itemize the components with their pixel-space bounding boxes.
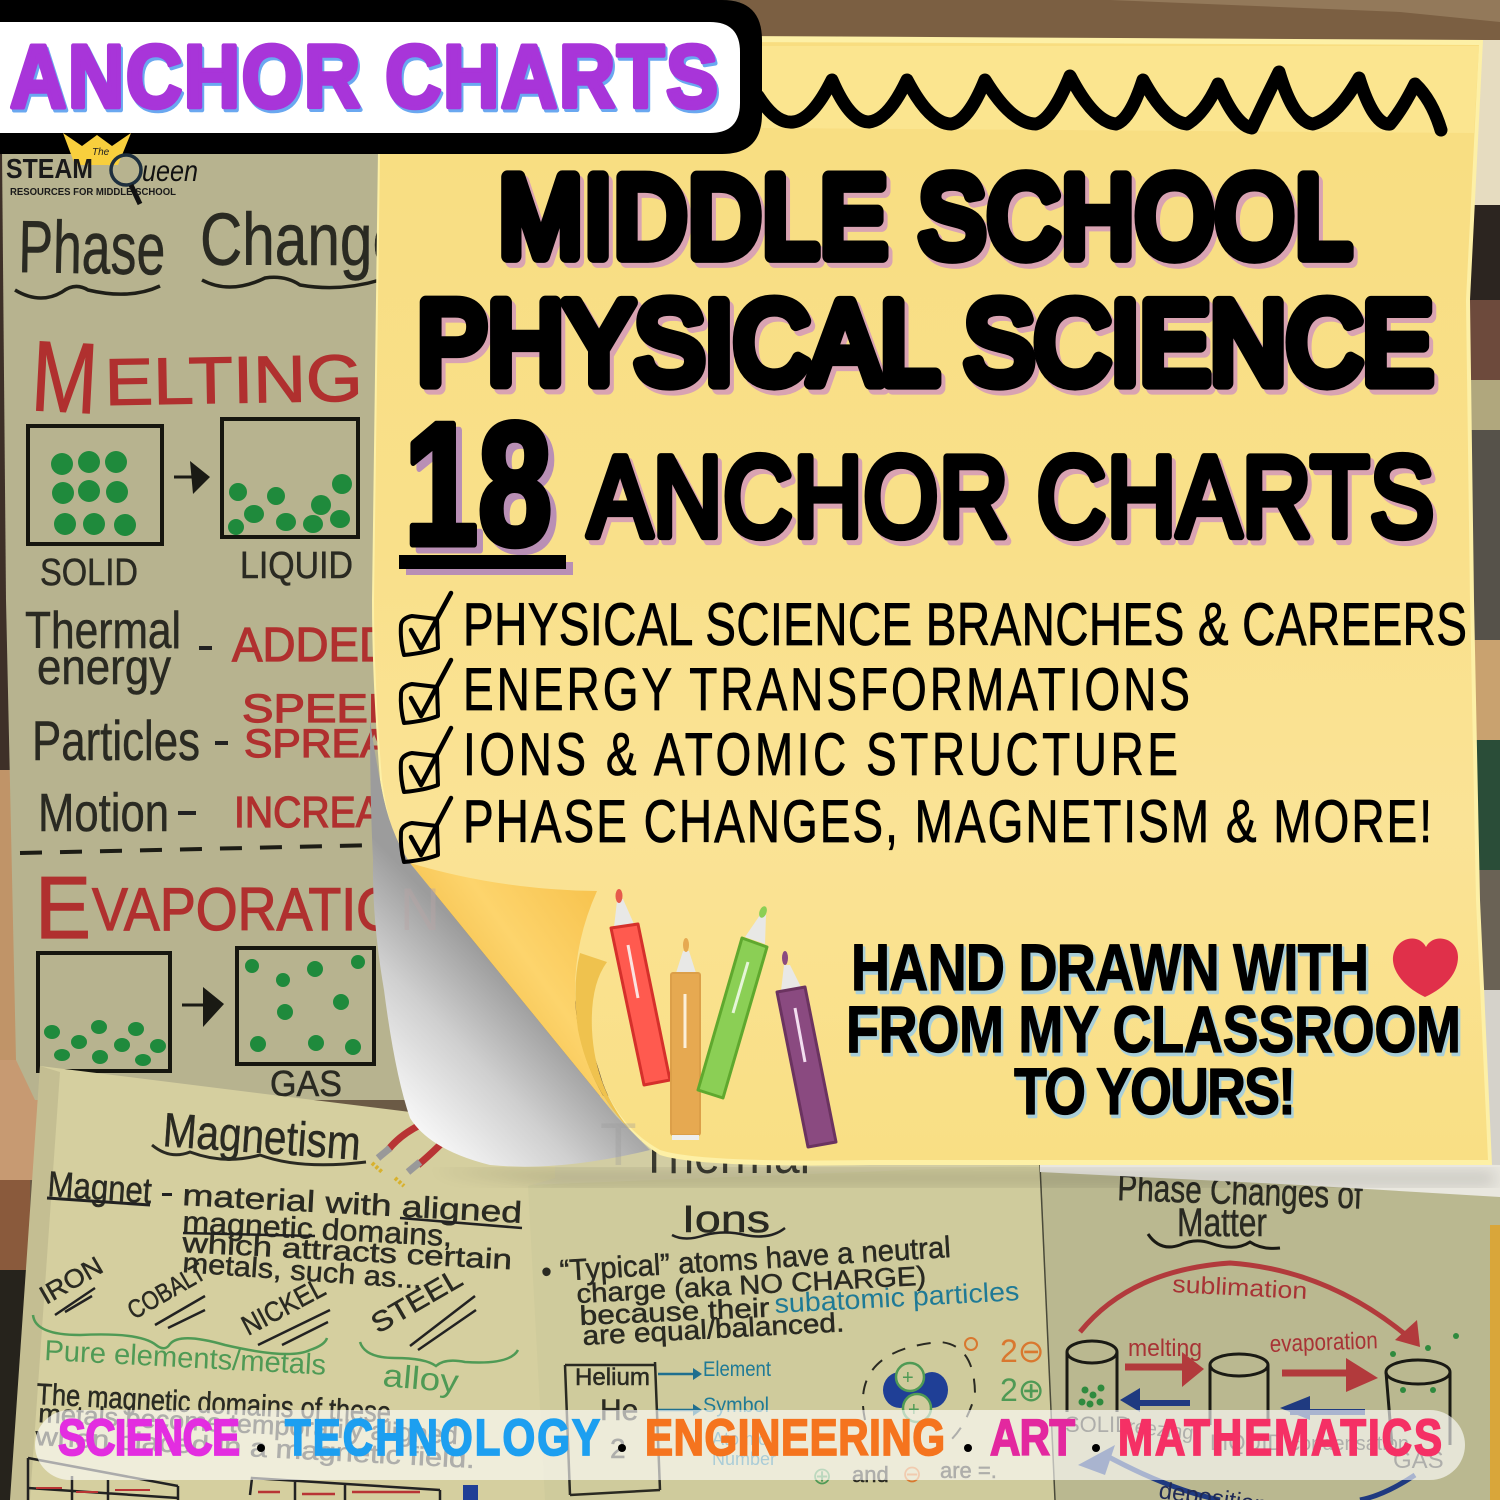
text block: magnet definition: metals, such as... bbox=[182, 1247, 423, 1295]
text block: typical atoms: subatomic particles bbox=[774, 1276, 1020, 1319]
diagram: helium atom: + bbox=[902, 1367, 914, 1389]
icon: horseshoe magnet bbox=[372, 1125, 445, 1186]
notes: melting properties: energy bbox=[37, 639, 171, 695]
diagram: phase arrows: LIQUID bbox=[1210, 1430, 1283, 1455]
notes: melting properties: Motion bbox=[38, 783, 169, 843]
ghost letters behind curl: N bbox=[400, 876, 440, 943]
text block: metals list bbox=[33, 1250, 518, 1400]
icon: red marker bbox=[611, 889, 670, 1085]
notes: melting properties: Particles bbox=[32, 709, 200, 772]
diagram: phase arrows: melting bbox=[1128, 1335, 1202, 1362]
diagram: helium atom: 2⊕ bbox=[1000, 1372, 1045, 1408]
banner: steam subjects bbox=[35, 1409, 1465, 1480]
text block: magnet definition bbox=[46, 1163, 523, 1295]
checklist: ENERGY TRANSFORMATIONS bbox=[463, 656, 1190, 724]
diagram: phase arrows: condensation bbox=[1290, 1433, 1409, 1455]
logo: the steam queen: STEAM bbox=[6, 153, 93, 184]
art: ART bbox=[990, 1409, 1075, 1466]
text block: metals list: COBALT bbox=[122, 1257, 211, 1325]
diagram: helium atom: ⊕ bbox=[812, 1463, 832, 1490]
heading: anchor charts: ANCHOR CHARTS bbox=[588, 433, 1434, 561]
science: SCIENCE bbox=[58, 1409, 240, 1466]
heading: anchor charts banner: ANCHOR CHARTS bbox=[10, 26, 718, 126]
notes: melting properties: SPREAD bbox=[244, 722, 419, 766]
diagram: helium element card: Symbol bbox=[703, 1394, 769, 1417]
heading: melting: M bbox=[29, 320, 101, 435]
text block: typical atoms: are equal/balanced. bbox=[582, 1307, 845, 1351]
diagram: phase arrows: GAS bbox=[1393, 1447, 1444, 1474]
diagram: helium atom: 2⊖ bbox=[1000, 1333, 1045, 1369]
checklist: IONS & ATOMIC STRUCTURE bbox=[463, 721, 1178, 789]
icon: checkbox 2 bbox=[401, 660, 451, 723]
notes: melting properties bbox=[20, 602, 434, 853]
diagram: helium atom: are =. bbox=[940, 1458, 997, 1483]
diagram: phase arrows bbox=[1065, 1327, 1459, 1474]
diagram: phase arrows: freezing bbox=[1121, 1415, 1195, 1444]
header tab bbox=[0, 0, 762, 154]
text block: metals list: STEEL bbox=[366, 1262, 468, 1339]
decorative wave bbox=[758, 72, 1441, 130]
diagram: liquid to gas: GAS bbox=[270, 1063, 342, 1104]
chart title: Change bbox=[200, 198, 405, 281]
diagram: sublimation arrow: sublimation bbox=[1172, 1271, 1308, 1305]
heading: physical science: PHYSICAL SCIENCE bbox=[421, 282, 1437, 413]
diagram: three containers bbox=[1067, 1341, 1450, 1445]
panel: ions chart bbox=[527, 1165, 1055, 1500]
note shadow bbox=[430, 1170, 1495, 1185]
diagram: liquid to gas bbox=[38, 948, 374, 1104]
diagram: helium element card: Atomic bbox=[712, 1429, 767, 1449]
text block: hand drawn tagline: TO YOURS! bbox=[1016, 1057, 1298, 1131]
technology: TECHNOLOGY bbox=[285, 1409, 600, 1466]
icon: markers bbox=[611, 889, 836, 1147]
checklist: PHASE CHANGES, MAGNETISM & MORE! bbox=[463, 788, 1432, 856]
text block: typical atoms: charge (aka NO CHARGE) bbox=[576, 1261, 927, 1309]
diagram: helium element card: He bbox=[600, 1394, 638, 1427]
notes: melting properties: Thermal bbox=[25, 602, 181, 660]
text block: hand drawn tagline: HAND DRAWN WITH bbox=[853, 933, 1371, 1007]
chart title bbox=[672, 1199, 785, 1241]
text block: typical atoms: because their bbox=[579, 1293, 770, 1331]
diagram: helium atom: ⊖ bbox=[902, 1461, 922, 1488]
heading: anchor charts banner: ANCHOR CHARTS bbox=[12, 29, 720, 129]
logo: the steam queen: The bbox=[92, 147, 110, 158]
diagram: phase arrows: SOLID bbox=[1065, 1412, 1131, 1437]
chart title: Ions bbox=[682, 1199, 770, 1241]
panel: phase change chart bbox=[2, 150, 440, 1104]
diagram: solid to liquid: SOLID bbox=[40, 552, 138, 594]
chart title: Phase bbox=[18, 205, 166, 291]
diagram: sublimation arrow bbox=[1080, 1263, 1420, 1347]
diagram: helium element card: 2 bbox=[610, 1433, 626, 1464]
diagram: helium element card: Helium bbox=[575, 1364, 650, 1391]
notes: melting properties: SPEED bbox=[242, 687, 402, 731]
diagram: helium element card: Element bbox=[703, 1358, 771, 1381]
white paper strip under note bbox=[1040, 1160, 1500, 1197]
diagram: helium atom: and bbox=[852, 1462, 889, 1487]
panel: thermal chart behind note bbox=[440, 1085, 1045, 1190]
curled corner: grey back bbox=[370, 720, 650, 1167]
checklist bbox=[401, 591, 1467, 862]
logo: the steam queen bbox=[6, 133, 198, 204]
checklist: PHYSICAL SCIENCE BRANCHES & CAREERS bbox=[463, 591, 1467, 659]
icon: orange marker bbox=[671, 938, 700, 1140]
curled corner: gold flap bbox=[410, 863, 617, 1117]
icon: green marker bbox=[698, 905, 768, 1098]
sticky band at top of note bbox=[762, 46, 1479, 133]
icon: purple marker bbox=[777, 951, 836, 1147]
panel: yellow sticky note bbox=[370, 36, 1492, 1167]
chart title bbox=[1117, 1167, 1363, 1248]
text block: magnetic domains note bbox=[33, 1378, 476, 1474]
icon: checkbox 4 bbox=[401, 798, 451, 862]
chart title bbox=[15, 198, 405, 298]
text block: magnetic domains note: The magnetic domains of these bbox=[36, 1378, 392, 1430]
heading: middle school: MIDDLE SCHOOL bbox=[503, 158, 1355, 285]
text block: magnetic domains note: metals become temporarily aligned bbox=[38, 1398, 459, 1450]
panel: thermal chart behind note: Thermal bbox=[640, 1127, 810, 1185]
icon: checkbox 1 bbox=[401, 593, 451, 655]
mathematics: MATHEMATICS bbox=[1118, 1409, 1442, 1466]
big number 18: 18 bbox=[410, 392, 558, 587]
text block: magnetic domains note: when placed in a magnetic field. bbox=[33, 1421, 476, 1474]
logo: the steam queen: RESOURCES FOR MIDDLE SCHOOL bbox=[10, 187, 176, 198]
icon: checkbox 3 bbox=[401, 728, 451, 792]
heading: evaporation bbox=[35, 858, 437, 957]
text block: magnet definition: Magnet bbox=[46, 1163, 153, 1211]
ghost letters behind curl bbox=[400, 876, 637, 1178]
text block: typical atoms: • “Typical” atoms have a neutral bbox=[540, 1231, 952, 1289]
chart title: Magnetism bbox=[161, 1104, 362, 1171]
diagram: helium element card: Number bbox=[712, 1449, 776, 1469]
heading: middle school: MIDDLE SCHOOL bbox=[499, 153, 1351, 280]
text block: hand drawn tagline bbox=[846, 930, 1463, 1131]
heading: evaporation: E bbox=[35, 858, 91, 957]
notes: melting properties: INCREASE bbox=[234, 788, 434, 837]
heading: evaporation: VAPORATION bbox=[92, 876, 437, 943]
text block: metals list: alloy bbox=[381, 1357, 460, 1400]
text block: metals list: NICKEL bbox=[236, 1272, 330, 1341]
engineering: ENGINEERING bbox=[645, 1409, 945, 1466]
text block: hand drawn tagline: TO YOURS! bbox=[1014, 1054, 1296, 1128]
big number 18: 18 bbox=[404, 386, 552, 581]
ghost letters behind curl: T bbox=[600, 1111, 637, 1178]
diagram: helium atom: + bbox=[908, 1399, 920, 1421]
text block: typical atoms bbox=[540, 1231, 1020, 1351]
panel: phase changes of matter chart bbox=[1040, 1150, 1500, 1500]
icon: heart bbox=[1393, 939, 1458, 997]
notes: melting properties: ADDED bbox=[232, 619, 392, 672]
text block: hand drawn tagline: FROM MY CLASSROOM bbox=[848, 995, 1463, 1069]
diagram: helium atom bbox=[812, 1333, 1045, 1490]
text block: magnet definition: material with aligned bbox=[182, 1179, 523, 1230]
heading: physical science: PHYSICAL SCIENCE bbox=[417, 277, 1433, 408]
diagram: solid to liquid bbox=[28, 419, 358, 594]
text block: metals list: IRON bbox=[34, 1250, 108, 1310]
text block: magnet definition: magnetic domains, bbox=[182, 1206, 453, 1253]
heading: melting bbox=[29, 320, 363, 435]
diagram: phase arrows: evaporation bbox=[1269, 1327, 1378, 1358]
text block: hand drawn tagline: HAND DRAWN WITH bbox=[851, 930, 1369, 1004]
text block: hand drawn tagline: FROM MY CLASSROOM bbox=[846, 992, 1461, 1066]
logo: the steam queen: ueen bbox=[142, 155, 198, 188]
diagram: helium element card bbox=[565, 1358, 776, 1495]
text block: metals list: Pure elements/metals bbox=[44, 1335, 327, 1382]
diagram: deposition arrow bbox=[1078, 1445, 1415, 1500]
heading: melting: ELTING bbox=[104, 341, 363, 419]
chart title: Matter bbox=[1177, 1201, 1267, 1245]
panel: magnetism chart bbox=[10, 1066, 555, 1500]
text block: magnet definition: which attracts certain bbox=[180, 1227, 513, 1275]
chart title: Phase Changes of bbox=[1117, 1167, 1363, 1218]
heading: anchor charts: ANCHOR CHARTS bbox=[592, 438, 1438, 566]
curled corner: pale inner fold bbox=[575, 953, 632, 1132]
diagram: magnetic domains bbox=[28, 1458, 478, 1500]
diagram: solid to liquid: LIQUID bbox=[240, 545, 353, 587]
